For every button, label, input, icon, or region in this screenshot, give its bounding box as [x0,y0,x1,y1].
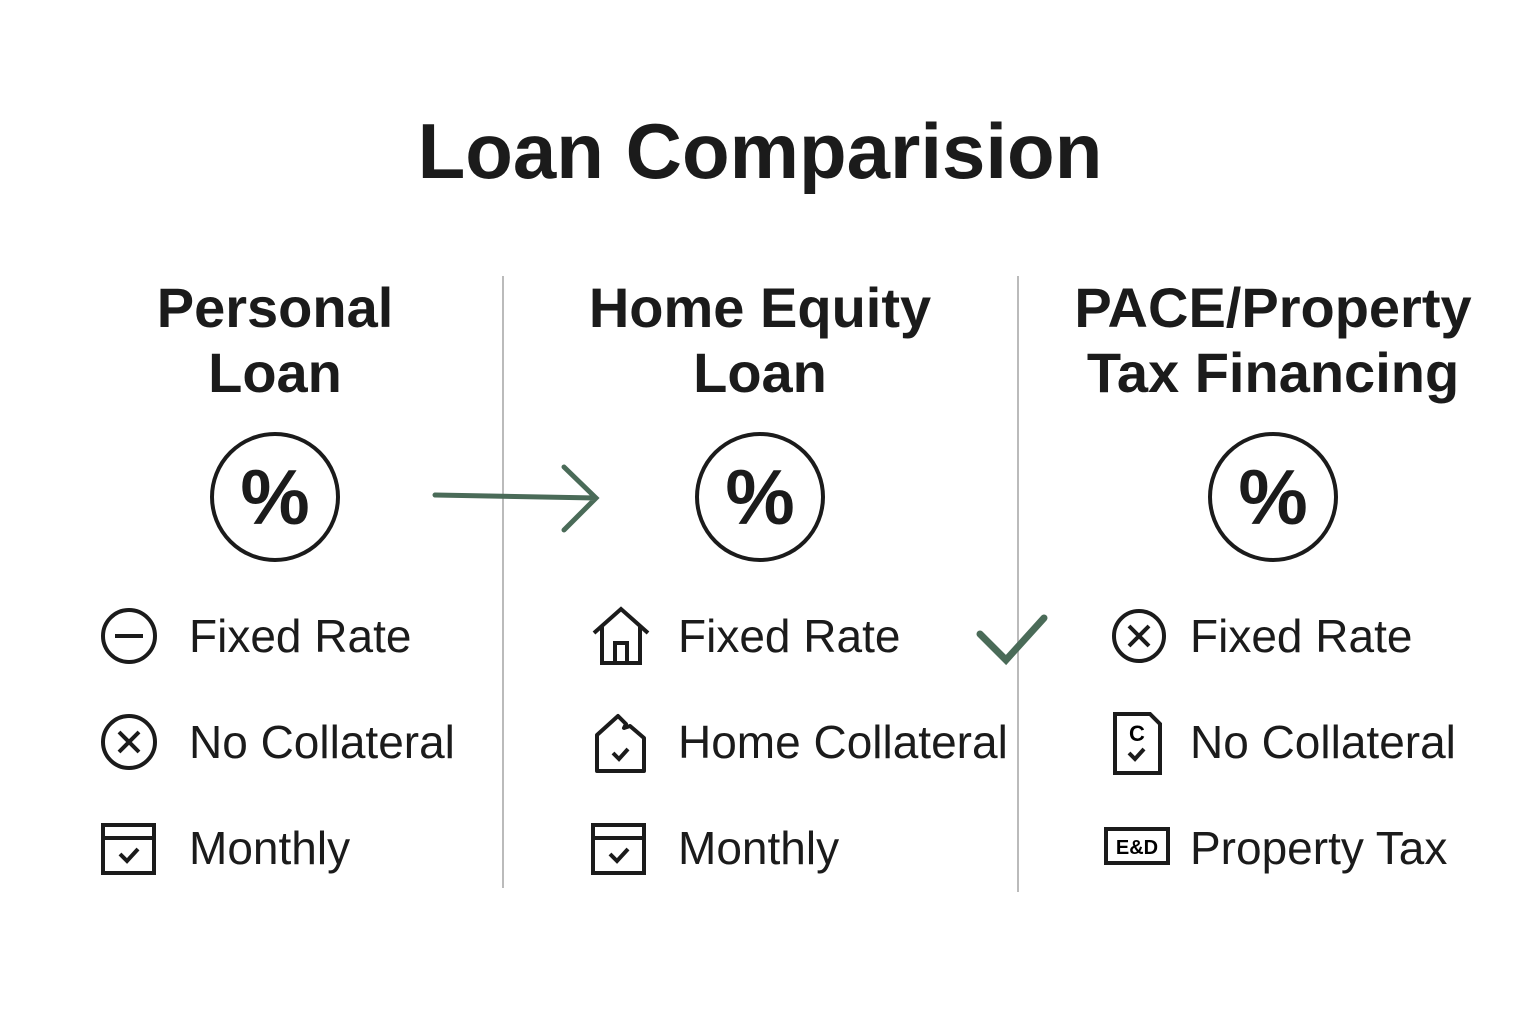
row: monthly [101,822,350,875]
row: no collateral: No Collateral [189,716,455,768]
heading: personal loan: Personal [157,276,393,339]
row: home collateral: Home Collateral [678,716,1008,768]
row: fixed rate [592,606,900,665]
heading: PACE: Tax Financing [1087,341,1459,404]
heading: home equity: Home Equity [589,276,931,339]
panel: personal loan [101,276,455,875]
row: property tax: E&D [1116,837,1158,859]
heading: home equity [589,276,931,404]
row: fixed rate: Fixed Rate [1190,610,1412,662]
icon: percent circle [210,432,340,562]
row: monthly: Monthly [678,822,839,874]
row: monthly [591,822,839,875]
row: no collateral [1113,712,1456,775]
panel: home equity loan [589,276,1008,875]
row: property tax: Property Tax [1190,822,1447,874]
icon: percent circle: % [1238,453,1308,541]
icon: green check [976,614,1048,666]
row: fixed rate: Fixed Rate [678,610,900,662]
heading: PACE: PACE/Property [1074,276,1472,339]
heading: home equity: Loan [693,341,827,404]
icon: percent circle [1208,432,1338,562]
row: no collateral: C [1129,721,1145,746]
panel: PACE [1074,276,1472,874]
row: no collateral: No Collateral [1190,716,1456,768]
row: fixed rate: Fixed Rate [189,610,411,662]
arrow: green [432,464,600,532]
row: monthly: Monthly [189,822,350,874]
heading: personal loan: Loan [208,341,342,404]
row: no collateral [101,714,455,770]
row: home collateral [595,714,1008,773]
icon: percent circle [695,432,825,562]
icon: percent circle: % [240,453,310,541]
heading: PACE [1074,276,1472,404]
icon: percent circle: % [725,453,795,541]
title: Loan Comparision [418,107,1102,195]
row: fixed rate [101,608,411,664]
heading: personal loan [157,276,393,404]
